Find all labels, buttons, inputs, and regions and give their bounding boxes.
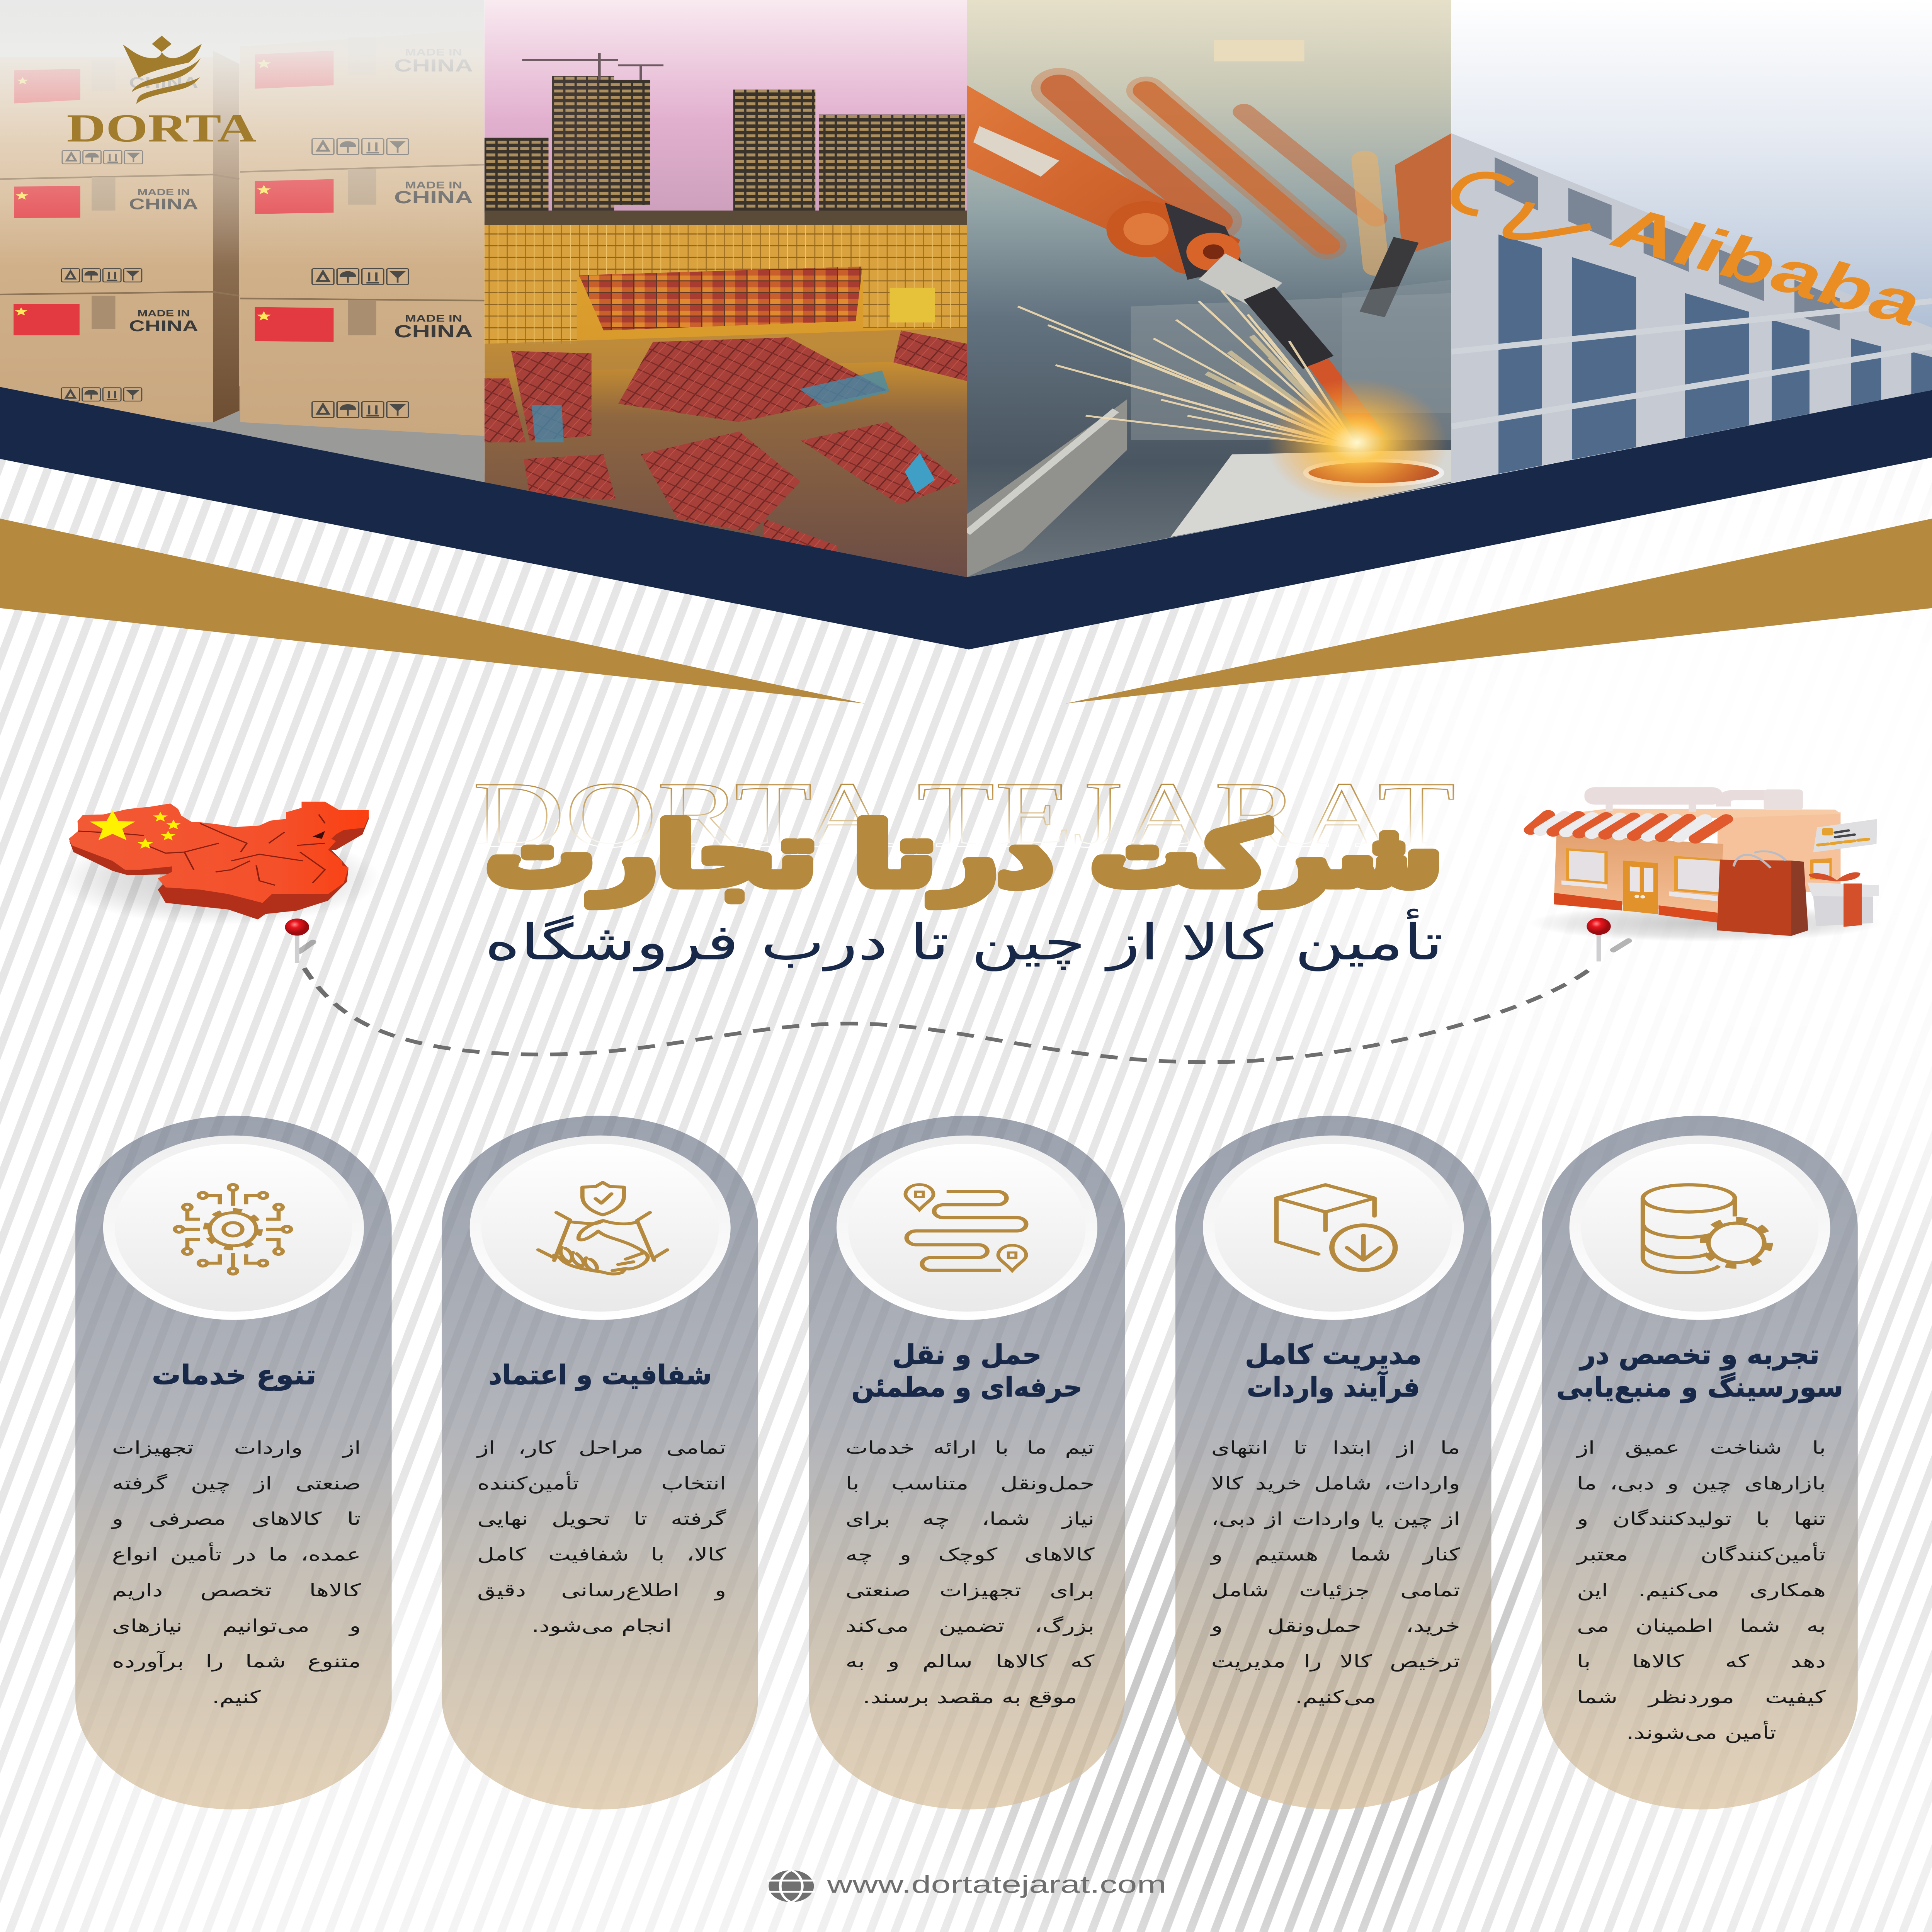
- card title: مدیریت کامل: [1245, 1339, 1422, 1371]
- photo: made in China cartons: CHINA: [394, 321, 473, 341]
- body text: professional transport: برای تجهیزات صنعتی: [845, 1580, 1094, 1600]
- gold wedge right: [1066, 519, 1932, 704]
- gold wedge left: [0, 519, 865, 704]
- photo: made in China cartons: CHINA: [394, 187, 473, 207]
- body text: import process management: کنار شما هستیم و: [1211, 1544, 1460, 1565]
- photo: made in China cartons: MADE IN: [137, 308, 190, 318]
- body text: sourcing expertise: تنها با تولیدکنندگان و: [1577, 1509, 1826, 1529]
- body text: professional transport: بزرگ، تضمین می‌کند: [845, 1616, 1094, 1636]
- card title: تجربه و تخصص در: [1579, 1339, 1820, 1371]
- body text: diversity of services: از واردات تجهیزات: [112, 1437, 361, 1458]
- navy chevron: [0, 387, 1932, 650]
- body text: diversity of services: تا کالاهای مصرفی و: [112, 1509, 361, 1529]
- card title: [1245, 1339, 1422, 1403]
- card title: حمل و نقل: [892, 1339, 1042, 1371]
- body text: transparency and trust: انجام می‌شود.: [532, 1616, 672, 1636]
- main title: شرکت درتا تجارت: [486, 806, 1442, 906]
- body text: professional transport: نیاز شما، چه برای: [845, 1509, 1094, 1529]
- logo: DORTA crown: [67, 36, 256, 150]
- panel: transparency and trust: [442, 1116, 758, 1810]
- icon: box download: [1276, 1185, 1395, 1270]
- map pin right: [1587, 918, 1629, 961]
- photo: made in China cartons: MADE IN: [405, 180, 462, 190]
- panel: import process management: [1175, 1116, 1492, 1810]
- body text: sourcing expertise: کیفیت موردنظر شما: [1577, 1687, 1826, 1708]
- body text: diversity of services: متنوع شما را برآورده: [112, 1651, 361, 1672]
- photo: Alibaba office building: Alibaba: [1600, 194, 1932, 338]
- photo: made in China cartons: MADE IN: [405, 47, 462, 58]
- icon: gear circuit: [175, 1185, 291, 1274]
- body text: transparency and trust: [477, 1430, 726, 1644]
- body text: professional transport: کالاهای کوچک و چه: [845, 1544, 1094, 1565]
- body text: professional transport: [845, 1430, 1094, 1715]
- photo: made in China cartons: MADE IN: [137, 187, 190, 197]
- body text: diversity of services: کنیم.: [212, 1687, 261, 1708]
- panel: professional transport: [809, 1116, 1125, 1810]
- card title: شفافیت و اعتماد: [488, 1359, 712, 1391]
- body text: import process management: ما از ابتدا تا انتهای: [1211, 1437, 1460, 1458]
- icon: handshake and shield: [538, 1182, 667, 1274]
- body text: import process management: از چین یا واردات از دبی،: [1211, 1509, 1460, 1529]
- photo: made in China cartons: CHINA: [129, 196, 198, 213]
- panel: diversity of services: [75, 1116, 392, 1810]
- photo: container port and towers: [485, 0, 967, 578]
- card title: تنوع خدمات: [152, 1359, 316, 1391]
- body text: import process management: می‌کنیم.: [1295, 1687, 1376, 1708]
- website: www.dortatejarat.com: [827, 1871, 1167, 1898]
- body text: diversity of services: عمده، ما در تأمین انواع: [112, 1544, 361, 1565]
- body text: sourcing expertise: بازارهای چین و دبی، ما: [1577, 1473, 1826, 1493]
- header photo collage: [0, 0, 1932, 578]
- body text: diversity of services: کالاها تخصص داریم: [112, 1580, 361, 1600]
- body text: sourcing expertise: به شما اطمینان می: [1577, 1616, 1826, 1636]
- body text: professional transport: حمل‌ونقل متناسب با: [845, 1473, 1094, 1493]
- body text: sourcing expertise: همکاری می‌کنیم. این: [1577, 1580, 1826, 1600]
- body text: professional transport: موقع به مقصد برسند.: [863, 1687, 1077, 1708]
- card title: [852, 1339, 1082, 1403]
- photo: made in China cartons: CHINA: [129, 318, 198, 335]
- card title: فرآیند واردات: [1247, 1371, 1420, 1403]
- body text: import process management: [1211, 1430, 1460, 1715]
- photo: welding robot arm: [967, 0, 1451, 578]
- logo: DORTA crown: DORTA: [67, 106, 256, 150]
- photo: made in China cartons: MADE IN: [405, 313, 462, 324]
- body text: diversity of services: و می‌توانیم نیازهای: [112, 1616, 361, 1636]
- body text: sourcing expertise: تأمین می‌شوند.: [1626, 1723, 1776, 1743]
- outlined English title: DORTA TEJARAT: [473, 762, 1456, 867]
- body text: transparency and trust: تمامی مراحل کار، از: [477, 1437, 726, 1458]
- subtitle: تأمین کالا از چین تا درب فروشگاه: [485, 908, 1443, 972]
- photo: made in China cartons: CHINA: [129, 74, 198, 92]
- body text: sourcing expertise: دهد که کالاها با: [1577, 1651, 1826, 1672]
- body text: professional transport: که کالاها سالم و به: [845, 1651, 1094, 1672]
- card title: حرفه‌ای و مطمئن: [852, 1372, 1082, 1403]
- panel: sourcing expertise: [1542, 1116, 1858, 1810]
- icon: route with pins: [905, 1185, 1026, 1270]
- body text: transparency and trust: کالا، با شفافیت کامل: [477, 1544, 726, 1565]
- body text: diversity of services: [112, 1430, 361, 1715]
- photo: Alibaba office building: [1451, 0, 1932, 485]
- body text: diversity of services: صنعتی از چین گرفته: [112, 1473, 361, 1493]
- China 3D map: [56, 802, 381, 925]
- dashed route: [304, 965, 1595, 1062]
- map pin left: [285, 918, 313, 963]
- body text: import process management: ترخیص کالا را مدیریت: [1211, 1651, 1460, 1672]
- body text: transparency and trust: انتخاب تأمین‌کننده: [477, 1473, 726, 1493]
- body text: sourcing expertise: [1577, 1430, 1826, 1751]
- body text: professional transport: تیم ما با ارائه خدمات: [845, 1437, 1094, 1458]
- photo: made in China cartons: [0, 0, 485, 482]
- body text: sourcing expertise: با شناخت عمیق از: [1577, 1437, 1826, 1458]
- card title: [1556, 1339, 1843, 1403]
- body text: import process management: تمامی جزئیات شامل: [1211, 1580, 1460, 1600]
- body text: import process management: واردات، شامل خرید کالا: [1211, 1473, 1460, 1493]
- body text: transparency and trust: گرفته تا تحویل نهایی: [477, 1509, 726, 1529]
- photo: made in China cartons: CHINA: [394, 56, 473, 75]
- body text: sourcing expertise: تأمین‌کنندگان معتبر: [1577, 1544, 1826, 1565]
- body text: transparency and trust: و اطلاع‌رسانی دقیق: [477, 1580, 726, 1600]
- shop 3D illustration: [1529, 787, 1883, 942]
- icon: database gear: [1643, 1185, 1770, 1272]
- icon: globe: [767, 1870, 815, 1902]
- body text: import process management: خرید، حمل‌ونقل و: [1211, 1616, 1460, 1636]
